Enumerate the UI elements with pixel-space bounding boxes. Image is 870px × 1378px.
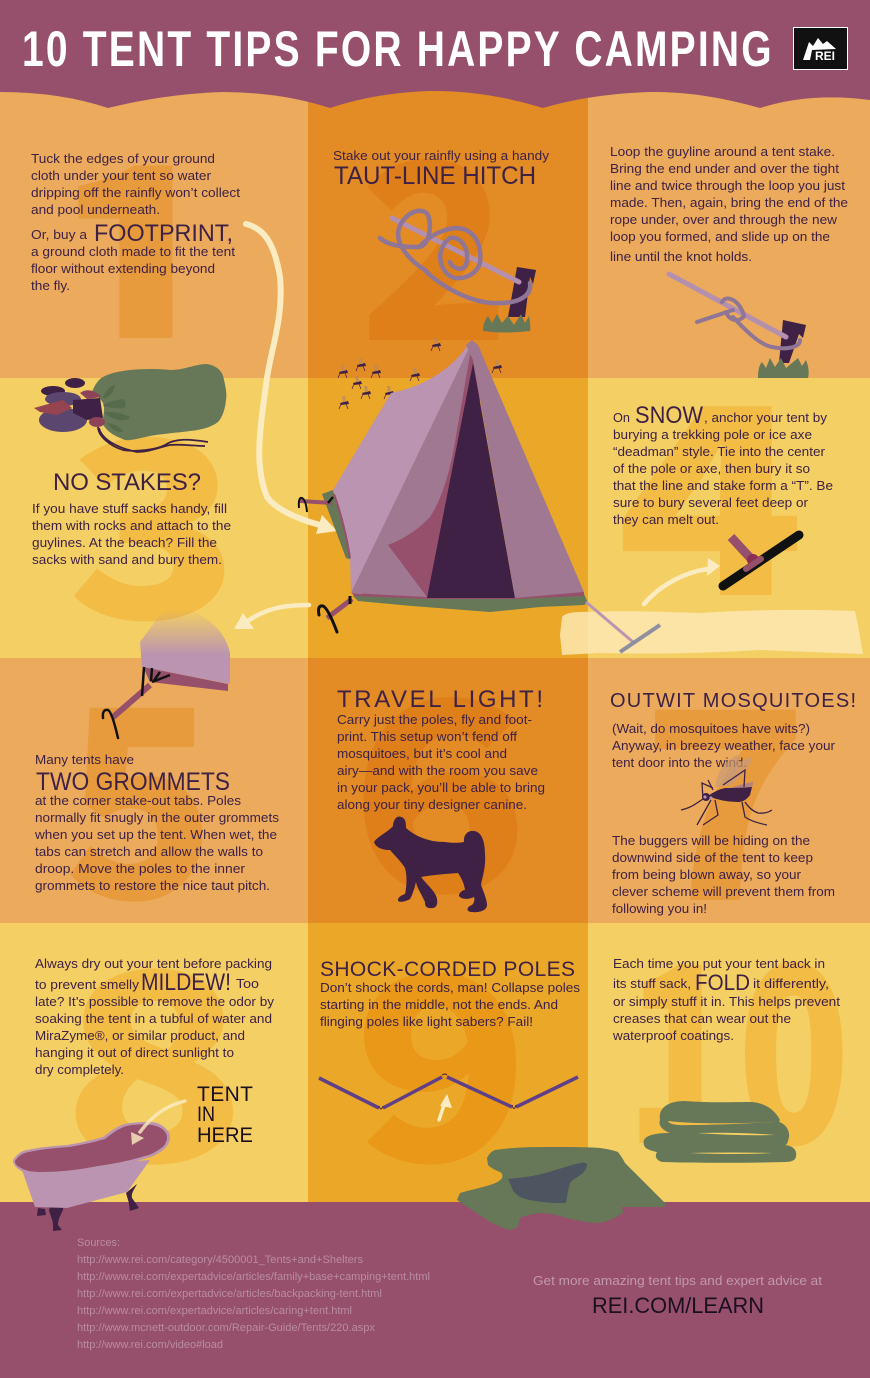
tip 7 text: (Wait, do mosquitoes have wits?) — [612, 721, 810, 736]
tip 4 text: , anchor your tent by — [704, 410, 828, 425]
tip 2 continued text: Loop the guyline around a tent stake. — [610, 144, 835, 159]
footer band — [0, 1202, 870, 1378]
icon: bottom-left stake tab — [318, 596, 352, 632]
tip 8 text: soaking the tent in a tubful of water and — [35, 1011, 272, 1026]
tip 7 text — [610, 690, 856, 916]
tip 5 text: at the corner stake-out tabs. Poles — [35, 793, 242, 808]
icon: stuff sack with rocks — [34, 364, 226, 452]
tip 1 text: Tuck the edges of your ground — [31, 151, 215, 166]
tip 1 text: FOOTPRINT, — [94, 220, 233, 247]
tip 1 text: Or, buy a — [31, 227, 88, 242]
tip 3 text — [32, 469, 231, 567]
tip 7 text: following you in! — [612, 901, 707, 916]
tip 2 continued text: line and twice through the loop you just — [610, 178, 845, 193]
numeral 7: 7 — [641, 597, 809, 976]
tip 5 text: TWO GROMMETS — [36, 768, 230, 796]
arrow: snow to pole — [644, 569, 708, 604]
tip 8 text: MILDEW! — [141, 969, 231, 996]
tip 10 text: Each time you put your tent back in — [613, 956, 825, 971]
arrow: tent corner to grommets — [245, 605, 309, 623]
tip 10 text: FOLD — [695, 970, 750, 995]
tip 9 text: flinging poles like light sabers? Fail! — [320, 1014, 533, 1029]
icon: bathtub — [13, 1122, 170, 1231]
sources list: http://www.rei.com/category/4500001_Tents+and+Shelters — [77, 1254, 363, 1266]
tip 10 text: or simply stuff it in. This helps prevent — [613, 994, 840, 1009]
tip 3 text: sacks with sand and bury them. — [32, 552, 222, 567]
tip 4 text: burying a trekking pole or ice axe — [613, 427, 812, 442]
arrow: footprint to tent — [246, 224, 328, 527]
tip 4 text: sure to bury several feet deep or — [613, 495, 809, 510]
tip 1 text: and pool underneath. — [31, 202, 160, 217]
tip 3 text: guylines. At the beach? Fill the — [32, 535, 217, 550]
numeral 4: 4 — [616, 293, 805, 670]
icon: shock-corded poles — [319, 1074, 578, 1109]
tip 6 text: print. This setup won’t fend off — [337, 729, 517, 744]
label: tent in here: IN — [197, 1103, 215, 1126]
tip 6 text: mosquitoes, but it’s cool and — [337, 746, 507, 761]
icon: top-left stake tab — [299, 497, 333, 512]
icon: mosquito swarm — [338, 338, 502, 409]
tip 10 text: its stuff sack, — [613, 976, 691, 991]
tip 4 text: “deadman” style. Tie into the center — [613, 444, 826, 459]
tip 5 text: tabs can stretch and allow the walls to — [35, 844, 263, 859]
icon: folded tent — [644, 1101, 796, 1163]
tip 1 text: dripping off the rainfly won’t collect — [31, 185, 240, 200]
tip 3 text: them with rocks and attach to the — [32, 518, 231, 533]
label: tent in here — [197, 1083, 253, 1147]
tip 7 text: The buggers will be hiding on the — [612, 833, 810, 848]
arrow: poles — [439, 1102, 445, 1120]
numeral 5: 5 — [64, 595, 216, 974]
sources list — [77, 1237, 430, 1351]
tip 8 text: hanging it out of direct sunlight to — [35, 1045, 234, 1060]
call to action: Get more amazing tent tips and expert advice at — [533, 1273, 822, 1288]
header band — [0, 0, 870, 108]
tip 6 text: in your pack, you’ll be able to bring — [337, 780, 545, 795]
tip 5 text — [34, 752, 280, 893]
tip 9 text — [320, 958, 581, 1029]
icon: taut-line hitch knot — [380, 211, 536, 332]
tip 2 continued text: made. Then, again, bring the end of the — [610, 195, 848, 210]
tip 4 text: of the pole or axe, then bury it so — [613, 461, 810, 476]
arrow head: poles — [440, 1094, 452, 1108]
tip 6 text — [337, 686, 545, 812]
tip 4 text: SNOW — [635, 402, 703, 429]
tip 1 text: cloth under your tent so water — [31, 168, 212, 183]
numeral 8: 8 — [61, 859, 247, 1236]
tip 7 text: clever scheme will prevent them from — [612, 884, 835, 899]
tip 8 text: Too — [236, 976, 259, 991]
tip 7 text: from being blown away, so your — [612, 867, 802, 882]
sources list: http://www.mcnett-outdoor.com/Repair-Guide/Tents/220.aspx — [77, 1322, 375, 1334]
call to action — [533, 1273, 822, 1318]
tip 2 continued text: line until the knot holds. — [610, 249, 752, 264]
tip 8 text: to prevent smelly — [35, 977, 140, 992]
numeral 9: 9 — [353, 866, 530, 1235]
title: 10 TENT TIPS FOR HAPPY CAMPING — [22, 20, 772, 77]
call to action: REI.COM/LEARN — [592, 1293, 764, 1318]
tip 9 text: SHOCK-CORDED POLES — [320, 958, 575, 981]
arrow head: footprint to tent — [316, 515, 337, 534]
tip 1 text: the fly. — [31, 278, 70, 293]
tip 5 text: when you set up the tent. When wet, the — [34, 827, 277, 842]
numeral 6: 6 — [350, 588, 529, 967]
icon: crumpled tent with mildew — [457, 1147, 665, 1230]
tip 7 text: Anyway, in breezy weather, face your — [612, 738, 836, 753]
sources list: http://www.rei.com/expertadvice/articles/caring+tent.html — [77, 1305, 352, 1317]
tip 6 text: airy—and with the room you save — [337, 763, 538, 778]
sources list: http://www.rei.com/video#load — [77, 1339, 223, 1351]
icon: mosquito — [681, 755, 772, 825]
tip 2 continued text — [610, 144, 848, 264]
label: tent in here: TENT — [197, 1083, 253, 1106]
tip 1 text — [31, 151, 240, 293]
icon: snow drift — [560, 610, 863, 655]
tip 2 text: TAUT-LINE HITCH — [334, 162, 536, 190]
sources list: http://www.rei.com/expertadvice/articles/family+base+camping+tent.html — [77, 1271, 430, 1283]
logo: REI — [794, 28, 848, 70]
arrow head: tent corner to grommets — [234, 613, 254, 629]
numeral 3: 3 — [67, 334, 240, 689]
label: tent in here: HERE — [197, 1124, 253, 1147]
tip 6 text: Carry just the poles, fly and foot- — [337, 712, 532, 727]
tip 4 text: that the line and stake form a “T”. Be — [613, 478, 833, 493]
tip 8 text: dry completely. — [35, 1062, 124, 1077]
tip 5 text: Many tents have — [35, 752, 134, 767]
tip 9 text: Don’t shock the cords, man! Collapse poles — [320, 980, 581, 995]
icon: large tent — [322, 340, 588, 612]
arrow: tent into bath — [140, 1101, 185, 1132]
arrow head: snow to pole — [707, 558, 720, 576]
tip 6 text: along your tiny designer canine. — [337, 797, 527, 812]
logo: REI: REI — [815, 49, 835, 63]
tip 8 text: late? It’s possible to remove the odor by — [35, 994, 275, 1009]
icon: buried stake and guyline — [586, 602, 660, 652]
tip 10 text: it differently, — [753, 976, 829, 991]
tip 4 text — [613, 402, 833, 527]
tip 8 text: Always dry out your tent before packing — [35, 956, 272, 971]
tip 1 text: a ground cloth made to fit the tent — [31, 244, 235, 259]
tip 2 text: Stake out your rainfly using a handy — [333, 148, 550, 163]
icon: grommet tent corner — [103, 608, 230, 738]
tip 4 text: On — [613, 410, 630, 425]
tip 7 text: downwind side of the tent to keep — [612, 850, 813, 865]
arrow head: tent into bath — [131, 1132, 144, 1145]
sources list: http://www.rei.com/expertadvice/articles/backpacking-tent.html — [77, 1288, 382, 1300]
tip 3 text: If you have stuff sacks handy, fill — [32, 501, 227, 516]
tip 7 text: OUTWIT MOSQUITOES! — [610, 690, 856, 712]
tip 10 text — [612, 956, 840, 1043]
tip 6 text: TRAVEL LIGHT! — [337, 686, 543, 713]
tip 2 continued text: loop you formed, and slide up on the — [610, 229, 830, 244]
numeral 1: 1 — [49, 36, 230, 468]
tip 10 text: waterproof coatings. — [612, 1028, 734, 1043]
icon: tightened knot — [669, 274, 809, 378]
tip 2 continued text: rope under, over and through the new — [610, 212, 838, 227]
tip 5 text: grommets to restore the nice taut pitch. — [35, 878, 270, 893]
sources list: Sources: — [77, 1237, 120, 1249]
icon: deadman trekking pole — [723, 535, 799, 586]
tip 10 text: creases that can wear out the — [613, 1011, 791, 1026]
tip 9 text: starting in the middle, not the ends. And — [320, 997, 558, 1012]
tip 8 text — [35, 956, 275, 1077]
tip 2 text — [333, 148, 550, 190]
tip 2 continued text: Bring the end under and over the tight — [610, 161, 839, 176]
tip 7 text: tent door into the wind. — [612, 755, 747, 770]
tip 3 text: NO STAKES? — [53, 469, 201, 496]
tip 5 text: droop. Move the poles to the inner — [35, 861, 246, 876]
icon: dog silhouette — [374, 817, 487, 912]
tip 1 text: floor without extending beyond — [31, 261, 215, 276]
tip 4 text: they can melt out. — [613, 512, 719, 527]
tip 8 text: MiraZyme®, or similar product, and — [35, 1028, 245, 1043]
numeral 2: 2 — [359, 56, 511, 411]
tip 5 text: normally fit snugly in the outer grommets — [35, 810, 280, 825]
